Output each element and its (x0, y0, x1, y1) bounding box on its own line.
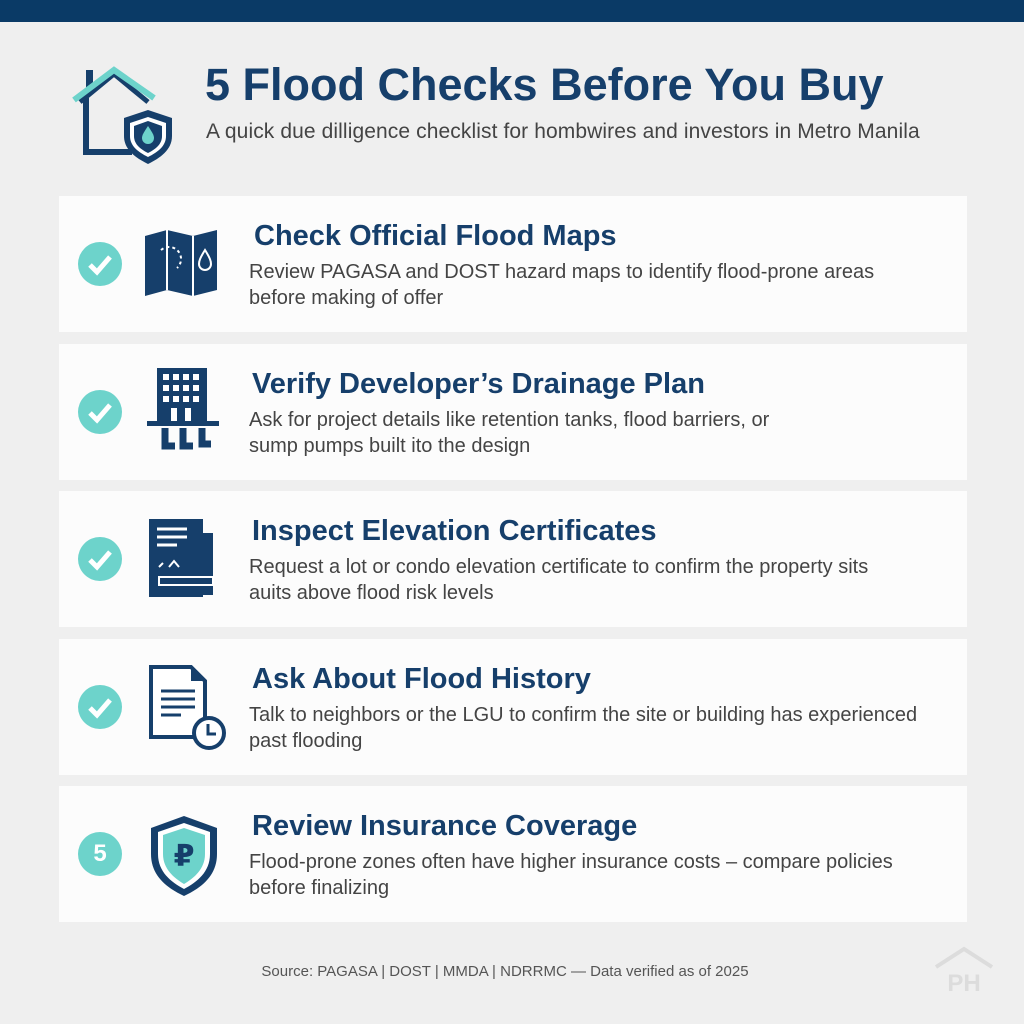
heading: Verify Developer’s Drainage Plan (252, 368, 705, 400)
icon: map (145, 230, 217, 296)
panel: card 1 (59, 196, 967, 332)
panel: card 4 (59, 639, 967, 775)
footer source: Source: PAGASA | DOST | MMDA | NDRRMC — Data verified as of 2025 (261, 963, 749, 980)
icon: document clock (149, 665, 226, 750)
check icon (78, 242, 122, 286)
text: Review PAGASA and DOST hazard maps to identify flood-prone areas (249, 261, 874, 283)
icon: house shield (72, 66, 172, 164)
text: past flooding (249, 730, 362, 752)
icon: building drainage (147, 368, 219, 450)
number badge (78, 832, 122, 876)
text: auits above flood risk levels (249, 582, 494, 604)
heading: Review Insurance Coverage (252, 810, 637, 842)
panel: card 3 (59, 491, 967, 627)
text: before making of offer (249, 287, 443, 309)
text (249, 409, 769, 457)
heading: Inspect Elevation Certificates (252, 515, 657, 547)
subtitle: A quick due dilligence checklist for hombwires and investors in Metro Manila (206, 120, 920, 143)
text: Request a lot or condo elevation certificate to confirm the property sits (249, 556, 868, 578)
text (249, 704, 917, 752)
text: Talk to neighbors or the LGU to confirm the site or building has experienced (249, 704, 917, 726)
title: 5 Flood Checks Before You Buy (205, 59, 883, 110)
icon: shield peso (151, 816, 217, 896)
icon: shield peso: ₽ (174, 840, 194, 873)
logo watermark (935, 947, 993, 995)
number badge: 5 (93, 840, 107, 867)
text: sump pumps built ito the design (249, 435, 530, 457)
heading: Check Official Flood Maps (254, 220, 617, 252)
top bar (0, 0, 1024, 22)
panel: card 5 (59, 786, 967, 922)
check icon (78, 537, 122, 581)
text (249, 261, 874, 309)
text: before finalizing (249, 877, 389, 899)
check icon (78, 390, 122, 434)
heading: Ask About Flood History (252, 663, 591, 695)
text: Flood-prone zones often have higher insurance costs – compare policies (249, 851, 893, 873)
text: Ask for project details like retention tanks, flood barriers, or (249, 409, 769, 431)
icon: certificate (149, 519, 213, 597)
panel: card 2 (59, 344, 967, 480)
text (249, 851, 893, 899)
check icon (78, 685, 122, 729)
text (249, 556, 868, 604)
